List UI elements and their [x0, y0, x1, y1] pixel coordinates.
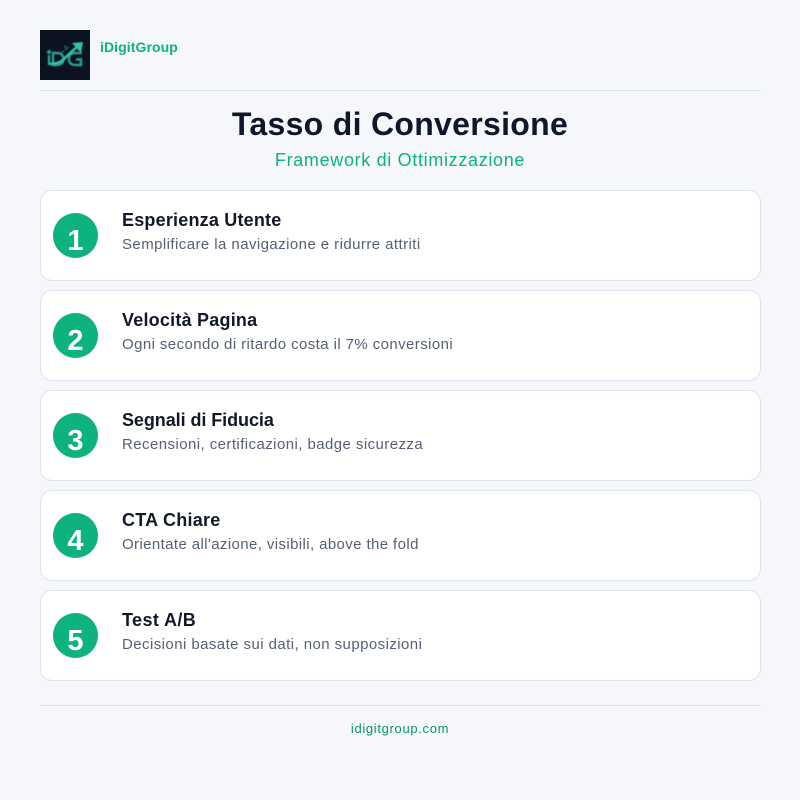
panel: step 5 — [40, 590, 761, 681]
step 4 heading: CTA Chiare — [122, 510, 221, 530]
panel: step 3 — [40, 390, 761, 481]
number badge 5: 5 — [67, 625, 84, 657]
number badge 4: 4 — [67, 525, 84, 557]
number badge 1: 1 — [67, 225, 84, 257]
logo — [40, 30, 90, 80]
number badge 3: 3 — [67, 425, 84, 457]
brand name: iDigitGroup — [100, 39, 178, 55]
number badge 4 — [53, 513, 98, 558]
step 3 description: Recensioni, certificazioni, badge sicurezza — [122, 436, 423, 453]
footer link: idigitgroup.com — [351, 721, 449, 736]
step 1 heading: Esperienza Utente — [122, 210, 281, 230]
step 4 description: Orientate all'azione, visibili, above the fold — [122, 536, 419, 553]
step 5 heading: Test A/B — [122, 610, 196, 630]
step 2 description: Ogni secondo di ritardo costa il 7% conversioni — [122, 336, 453, 353]
step 3 heading: Segnali di Fiducia — [122, 410, 274, 430]
panel: step 1 — [40, 190, 761, 281]
number badge 2 — [53, 313, 98, 358]
number badge 2: 2 — [67, 325, 84, 357]
number badge 5 — [53, 613, 98, 658]
step 2 heading: Velocità Pagina — [122, 310, 257, 330]
number badge 3 — [53, 413, 98, 458]
subtitle: Framework di Ottimizzazione — [275, 150, 525, 170]
step 1 description: Semplificare la navigazione e ridurre attriti — [122, 236, 421, 253]
panel: step 2 — [40, 290, 761, 381]
number badge 1 — [53, 213, 98, 258]
panel: step 4 — [40, 490, 761, 581]
step 5 description: Decisioni basate sui dati, non supposizioni — [122, 636, 422, 653]
title: Tasso di Conversione — [232, 106, 568, 142]
